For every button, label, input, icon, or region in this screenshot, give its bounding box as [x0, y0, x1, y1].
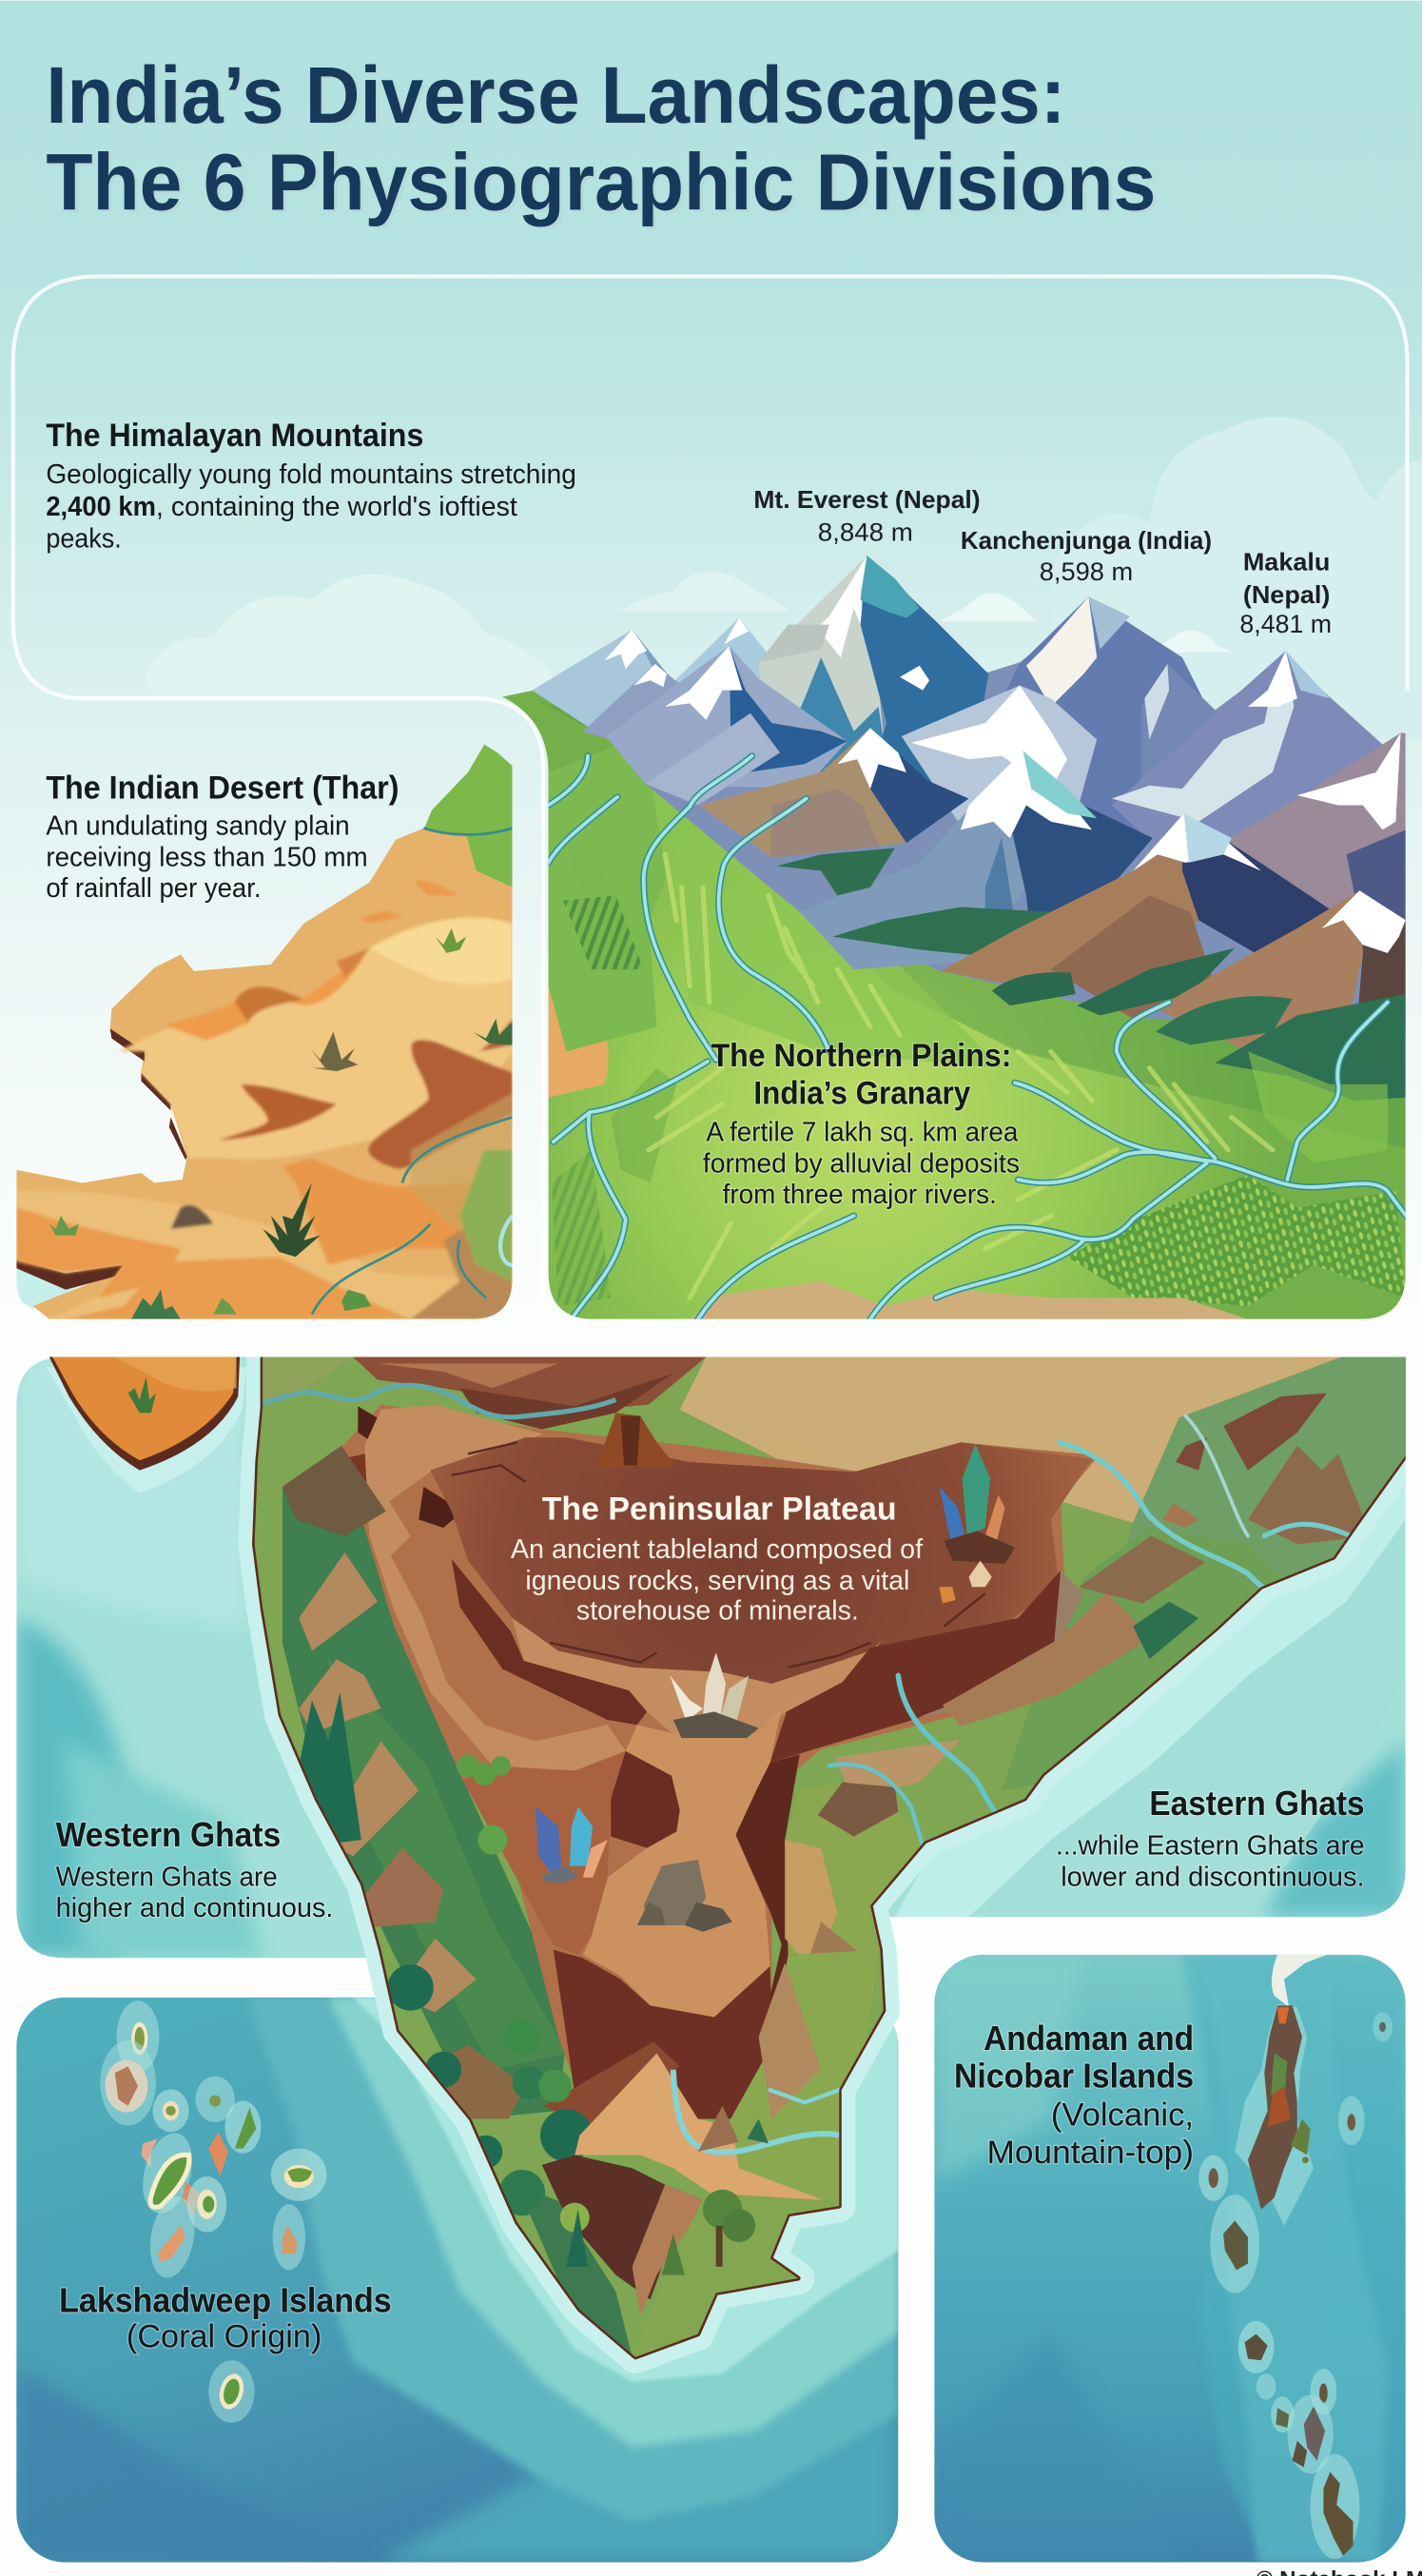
- rocks lower: [637, 1860, 732, 1932]
- text: Eastern Ghats: ...while Eastern Ghats are: [1056, 1831, 1365, 1862]
- Mt. Everest: [759, 556, 988, 789]
- text: Andaman and Nicobar Islands: [954, 2019, 1194, 2171]
- panel: Indian Desert: [16, 745, 513, 1319]
- text: Indian Desert: of rainfall per year.: [46, 873, 261, 904]
- text: Eastern Ghats: [1056, 1784, 1365, 1892]
- tan top plain: [680, 1357, 1341, 1523]
- text: Peninsular Plateau: igneous rocks, serving as a vital: [525, 1566, 909, 1596]
- south mountain: [542, 2156, 706, 2299]
- west ghats trees: [296, 1692, 593, 2215]
- crystals top right: [939, 1444, 1015, 1603]
- text: Lakshadweep Islands: [59, 2280, 392, 2354]
- text: Northern Plains: from three major rivers.: [723, 1180, 997, 1210]
- left canyon: [452, 1559, 647, 1725]
- plateau underlay: [340, 1405, 1099, 2127]
- west ghats mountains: [282, 1446, 525, 2119]
- text: Indian Desert: An undulating sandy plain: [46, 811, 350, 842]
- sea at corner: [17, 1267, 84, 1309]
- text: Northern Plains: formed by alluvial deposits: [703, 1148, 1020, 1179]
- text: Western Ghats: Western Ghats: [56, 1815, 281, 1854]
- lower right tone: [378, 2398, 898, 2563]
- clouds: [145, 417, 1422, 739]
- bottom corner deep: [16, 2365, 378, 2563]
- main mesa: [430, 1437, 1092, 1684]
- crystals lower left: [536, 1807, 608, 1883]
- text: Eastern Ghats: Eastern Ghats: [1149, 1784, 1365, 1823]
- label: Mt. Everest: [753, 487, 981, 547]
- text: Indian Desert: receiving less than 150 mm: [46, 842, 368, 872]
- left front range: [606, 646, 847, 805]
- text: Indian Desert: The Indian Desert (Thar): [46, 771, 399, 807]
- desert spill on west of plains: [549, 928, 609, 1098]
- text: Eastern Ghats: lower and discontinuous.: [1061, 1862, 1365, 1892]
- base land: [246, 1357, 1412, 2375]
- crystals center: [670, 1652, 759, 1738]
- east side slopes: [785, 1536, 1205, 1996]
- label: Mt. Everest: 8,848 m: [818, 518, 913, 547]
- desert fragment on sea: [46, 1357, 246, 1493]
- text: Lakshadweep Islands: (Coral Origin): [127, 2318, 321, 2354]
- panel: Andaman sea: [934, 1955, 1406, 2563]
- text: Northern Plains: The Northern Plains:: [711, 1038, 1011, 1074]
- small trees mid: [457, 1754, 572, 2102]
- label: Makalu: Makalu: [1243, 550, 1330, 576]
- dark cliffs: [16, 1028, 187, 1290]
- Andaman and Nicobar islands: [1198, 1955, 1393, 2559]
- forests back: [777, 848, 1067, 956]
- mid terrace: [463, 1751, 626, 1955]
- Lakshadweep islands: [100, 2000, 327, 2423]
- text: Peninsular Plateau: [511, 1491, 923, 1627]
- field patches: [552, 896, 1404, 1306]
- sea contour: [1182, 1955, 1406, 2563]
- tan rim under mesa: [513, 1618, 884, 1733]
- sea contour light: [246, 1998, 898, 2521]
- label: Kanchenjunga: Kanchenjunga (India): [961, 528, 1212, 555]
- title: India’s Diverse Landscapes:: [49, 52, 1069, 143]
- right canyon wall: [770, 1571, 1061, 1763]
- desert land: [16, 829, 513, 1319]
- south canyon: [554, 1950, 771, 2119]
- text: Peninsular Plateau: storehouse of minerals.: [576, 1596, 859, 1627]
- heading: Himalayan Mountains: , containing the world's ioftiest: [156, 492, 517, 522]
- land: peninsular India: [246, 1357, 1412, 2375]
- rivers: [549, 756, 1412, 1319]
- text: Andaman and Nicobar Islands: (Volcanic,: [1051, 2097, 1194, 2133]
- spine: [583, 1708, 782, 2017]
- title: India’s Diverse Landscapes:: [46, 49, 1065, 140]
- panel: Arabian Sea and Bay of Bengal upper: [16, 1357, 1406, 1958]
- text: Western Ghats: Western Ghats are: [56, 1862, 278, 1892]
- lower desert: [16, 1093, 513, 1319]
- upper terrace dark pits: [328, 1406, 463, 1528]
- Main brown peak: [941, 813, 1332, 1019]
- crack lines: [452, 1442, 985, 1815]
- upper strip: [263, 1357, 706, 1429]
- text: Western Ghats: higher and continuous.: [56, 1893, 333, 1923]
- heading: Himalayan Mountains: The Himalayan Mountains: [46, 418, 423, 454]
- label: Kanchenjunga: 8,598 m: [1040, 557, 1133, 586]
- heading: Himalayan Mountains: 2,400 km: [46, 492, 156, 522]
- deep sea left: [16, 1618, 131, 1958]
- big front snow peak: [800, 751, 1153, 969]
- text: Andaman and Nicobar Islands: Mountain-top): [987, 2135, 1194, 2171]
- title: The 6 Physiographic Divisions: [46, 137, 1156, 227]
- text: Andaman and Nicobar Islands: Nicobar Islands: [954, 2057, 1194, 2096]
- text: Northern Plains: A fertile 7 lakh sq. km area: [706, 1117, 1018, 1147]
- label: Makalu: [1239, 550, 1332, 638]
- text: Northern Plains: [703, 1038, 1020, 1210]
- text: Lakshadweep Islands: Lakshadweep Islands: [59, 2280, 392, 2319]
- dunes: [118, 881, 513, 1168]
- panel: Himalayas and Northern Plains illustration: [493, 556, 1412, 1322]
- label: Makalu: (Nepal): [1243, 582, 1330, 609]
- Himalaya panel outline: [13, 277, 1407, 1319]
- brown peak front left: [699, 728, 969, 858]
- label: Mt. Everest: Mt. Everest (Nepal): [753, 487, 981, 514]
- mountains back row: [533, 618, 767, 740]
- south sand: [575, 2053, 839, 2206]
- eastern rivers: [829, 1416, 1363, 1881]
- volcanic plug mesa icon: [596, 1413, 676, 1467]
- deep sea right: [1264, 1741, 1406, 1917]
- Makalu: [1112, 651, 1383, 837]
- right brown peak: [1156, 890, 1406, 1101]
- title: The 6 Physiographic Divisions: [49, 139, 1159, 229]
- text: Northern Plains: India’s Granary: [753, 1076, 971, 1112]
- terrace band: [364, 1405, 626, 1771]
- text: Indian Desert: [46, 771, 399, 904]
- heading: Himalayan Mountains: peaks.: [46, 523, 122, 554]
- text: Andaman and Nicobar Islands: Andaman and: [984, 2019, 1194, 2058]
- river cyan: [500, 1216, 513, 1265]
- NE green: [1083, 1357, 1412, 1708]
- Kanchenjunga: [902, 596, 1216, 832]
- plains ground: [493, 691, 1406, 1322]
- label: Makalu: 8,481 m: [1239, 610, 1332, 638]
- text: Peninsular Plateau: The Peninsular Plateau: [542, 1491, 897, 1527]
- heading: Himalayan Mountains: [46, 418, 576, 554]
- forests mid: [992, 948, 1235, 1015]
- green corner: [423, 745, 513, 888]
- desert plants: [49, 928, 513, 1319]
- title: [46, 49, 1159, 229]
- south trees: [509, 2176, 755, 2275]
- foothill greens: [534, 698, 1412, 1150]
- right edge peak: [1231, 732, 1406, 928]
- label: Kanchenjunga: [961, 528, 1212, 586]
- south east green and river: [730, 1950, 880, 2206]
- tan bottom: [690, 1281, 1248, 1319]
- heading: Himalayan Mountains: Geologically young fold mountains stretching: [46, 459, 576, 490]
- panel: Lakshadweep sea: [16, 1998, 898, 2563]
- mountain backdrop mass: [645, 654, 1406, 1020]
- text: Western Ghats: [56, 1815, 333, 1923]
- coastal halo: [255, 1357, 1406, 2357]
- west ghats dark green band: [282, 1471, 583, 2119]
- rivers in desert: [312, 829, 513, 1315]
- text: Peninsular Plateau: An ancient tableland composed of: [511, 1534, 923, 1565]
- river north: [263, 1385, 615, 1417]
- tilled stripes: [649, 854, 1273, 1298]
- NE hills: [1162, 1393, 1371, 1544]
